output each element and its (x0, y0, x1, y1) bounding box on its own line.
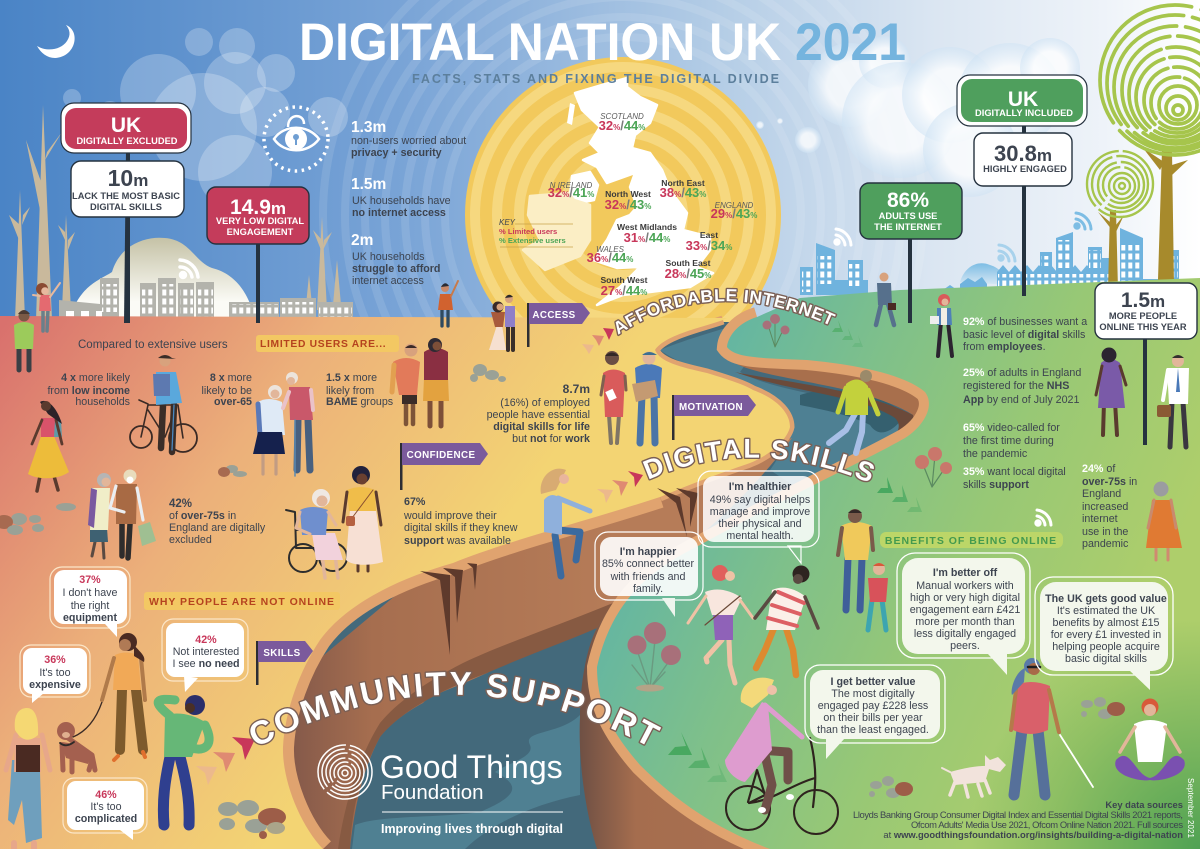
text block: non-user stats: no internet access (352, 207, 446, 219)
text block: low income: from low income (47, 385, 130, 397)
text block: 67%: support was available (404, 535, 511, 547)
rocks: top (470, 364, 506, 382)
regional statistics (548, 112, 757, 298)
person: meditating (1115, 698, 1185, 780)
speech bubble: 42%: 42% (195, 634, 217, 646)
rocks: bike (869, 776, 913, 798)
text block: non-user stats: 2m (351, 232, 373, 249)
date: September 2021 (1186, 778, 1195, 839)
text block: non-user stats: non-users worried about (351, 135, 466, 147)
speech bubble: 42% (162, 619, 248, 692)
left trees (9, 105, 341, 320)
person: waving woman (33, 283, 60, 331)
rocks: right (1081, 697, 1125, 719)
speech bubble: happier: with friends and (610, 571, 685, 583)
person: woman walking dog (73, 633, 145, 760)
map key: % Limited users (499, 227, 557, 236)
icon: padlock eye (264, 107, 328, 171)
text block: video-called (963, 422, 1060, 460)
sign: digitally included: DIGITALLY INCLUDED (975, 108, 1073, 118)
dog (57, 722, 95, 772)
speech bubble: better value: than the least engaged. (817, 724, 929, 736)
person: child (868, 563, 888, 630)
text block: low income (47, 372, 131, 408)
flag: access: ACCESS (532, 310, 576, 321)
canyon right wall (580, 603, 790, 849)
person: man in yellow (838, 509, 873, 610)
text block: BAME (326, 372, 393, 408)
person: sitting woman (541, 469, 590, 576)
windows (802, 240, 1178, 292)
sign: 14.9m: 14.9m (230, 196, 286, 219)
speech bubble: happier: 85% connect better (602, 558, 694, 570)
speech bubble: 36%: It's too (39, 667, 71, 679)
regional statistics: 28%/45% (665, 266, 711, 281)
sign: 14.9m: ENGAGEMENT (227, 227, 294, 237)
key data sources: Lloyds Banking Group Consumer Digital Index and Essential Digital Skills 2021 reports, (853, 809, 1183, 820)
river shading (352, 322, 905, 849)
flag: skills (256, 641, 313, 685)
sun (465, 57, 781, 373)
limited users heading: LIMITED USERS ARE... (260, 339, 386, 350)
sign: 10m (71, 161, 184, 217)
speech bubble: better value: engaged pay £228 less (818, 700, 928, 712)
text block: over-75s online: internet (1082, 513, 1118, 525)
flowers: bottom (628, 622, 681, 692)
canyon water (280, 322, 950, 849)
text block: NHS: App by end of July 2021 (963, 394, 1079, 406)
text block: over-75s: of over-75s in (169, 510, 236, 522)
speech bubble: 46% (63, 778, 147, 840)
map: Great Britain (575, 78, 713, 305)
person: running woman (688, 565, 753, 683)
limited users heading (78, 335, 399, 352)
flag: skills: SKILLS (263, 648, 301, 659)
benefits heading: BENEFITS OF BEING ONLINE (885, 535, 1057, 547)
limited users heading: Compared to extensive users (78, 339, 228, 351)
arrows: green after skills (877, 477, 922, 512)
key data sources: at www.goodthingsfoundation.org/insights/building-a-digital-nation (883, 829, 1183, 840)
rocks: left (0, 503, 76, 535)
speech bubble: happier (595, 532, 703, 617)
yellow land (0, 316, 790, 849)
text block: 67%: would improve their (403, 510, 497, 522)
speech bubble: better off: engagement earn £421 (910, 604, 1020, 616)
regional statistics: South West (600, 275, 648, 285)
couple (489, 295, 515, 350)
text block: over-75s: 42% (169, 498, 192, 510)
arrows: to community support (196, 737, 255, 785)
speech bubble: better value: on their bills per year (823, 712, 923, 724)
right cloud (756, 36, 1080, 197)
rocks: bottom (218, 800, 286, 839)
key data sources: Ofcom Adults' Media Use 2021, Ofcom Online Nation 2021. Full sources (911, 819, 1183, 830)
flowers: river (762, 314, 790, 347)
person: woman with white cane (1011, 658, 1093, 795)
old couple with bags (88, 470, 156, 558)
text block: NHS: registered for the NHS (963, 380, 1069, 392)
decorative rings around sun (323, 0, 923, 515)
text block: non-user stats: 1.5m (351, 176, 386, 193)
sign: 14.9m (207, 187, 309, 323)
speech bubble: healthier (698, 471, 819, 563)
flag: confidence (400, 443, 488, 490)
text block: over-75s online: over-75s in (1082, 476, 1137, 488)
excluded town (59, 238, 353, 323)
buildings (800, 228, 1193, 296)
text block: 8.7m (487, 382, 590, 445)
speech bubble: better off (897, 553, 1030, 675)
text block: video-called: 65% video-called for (963, 422, 1060, 434)
person: wheelchair user (286, 489, 347, 578)
sign: digitally excluded: DIGITALLY EXCLUDED (76, 136, 178, 146)
text block: BAME: BAME groups (326, 396, 393, 408)
person: businessman (876, 272, 896, 325)
speech bubble: better value: The most digitally (831, 688, 915, 700)
speech bubble: good value: helping people acquire (1052, 641, 1160, 653)
text block: low income: households (75, 396, 130, 408)
speech bubble: 37%: I don't have (63, 587, 118, 599)
speech bubble: 42%: Not interested (173, 646, 239, 658)
speech bubble: 37%: equipment (63, 612, 117, 624)
text block: non-user stats: UK households have (352, 195, 451, 207)
curved heading: digital skills: DIGITAL SKILLS (641, 438, 876, 482)
flag: access (527, 303, 590, 347)
speech bubble: 36% (20, 645, 90, 703)
canyon dark band (338, 603, 613, 849)
sign: digitally included: UK (1008, 88, 1038, 111)
regional statistics: 33%/34% (686, 238, 732, 253)
speech bubble: better off: I'm better off (933, 567, 998, 579)
map key: KEY (499, 218, 516, 227)
text block: 8.7m: digital skills for life (493, 421, 590, 433)
text block: NHS (963, 367, 1081, 406)
map: Northern Ireland (570, 172, 598, 203)
two men (392, 338, 449, 426)
person: green shirt man (14, 310, 34, 370)
text block: over-65 (202, 372, 252, 408)
sign: 10m: DIGITAL SKILLS (90, 202, 162, 212)
curved heading: community support: COMMUNITY SUPPORT (248, 670, 663, 746)
flag: confidence: CONFIDENCE (407, 450, 475, 461)
regional statistics: ENGLAND (715, 201, 754, 210)
speech bubble: 46%: complicated (75, 813, 137, 825)
why heading: WHY PEOPLE ARE NOT ONLINE (149, 596, 335, 608)
sign: 30.8m: 30.8m (994, 141, 1052, 166)
speech bubble: better off: more per month than (915, 616, 1015, 628)
arrows: to affordable internet (582, 328, 614, 354)
person: woman on bicycle (725, 678, 838, 834)
small fingerprint tree (1087, 151, 1153, 290)
regional statistics: West Midlands (617, 222, 677, 232)
sign: 10m: 10m (108, 165, 148, 191)
text block: over-75s (169, 498, 266, 546)
sign: 14.9m: VERY LOW DIGITAL (216, 216, 304, 226)
sign: 30.8m: HIGHLY ENGAGED (983, 164, 1067, 174)
person: cyclist (130, 355, 197, 452)
speech bubble: 36%: 36% (44, 654, 66, 666)
sign: 86%: 86% (887, 189, 929, 212)
text block: over-75s online: increased (1082, 501, 1128, 513)
speech bubble: better off: high or very high digital (910, 592, 1020, 604)
text block: non-user stats: 1.3m (351, 119, 386, 136)
regional statistics: 32%/41% (548, 185, 594, 200)
person: man in green (158, 695, 209, 825)
text block: businesses: basic level of digital skills (963, 329, 1085, 341)
sign: 1.5m: ONLINE THIS YEAR (1099, 322, 1187, 332)
sign: 10m: LACK THE MOST BASIC (72, 191, 180, 201)
text block: non-user stats: struggle to afford (352, 263, 440, 275)
text block: NHS: 25% of adults in England (963, 367, 1081, 379)
person: running woman striped (755, 566, 818, 675)
guide dog (942, 755, 1006, 797)
regional statistics: 32%/44% (599, 118, 645, 133)
regional statistics: South East (666, 258, 711, 268)
logo: Good Things Foundation: Improving lives through digital (381, 821, 563, 836)
sign: digitally excluded: UK (111, 114, 141, 137)
workers (601, 351, 662, 443)
logo: fingerprint (318, 745, 372, 799)
grey buildings (59, 278, 353, 323)
text block: over-65: 8 x more (210, 372, 252, 384)
map key: % Extensive users (499, 236, 566, 245)
speech bubble: better off: Manual workers with (916, 580, 1014, 592)
text block: local support: 35% want local digital (963, 466, 1066, 478)
logo: Good Things Foundation: Foundation (381, 781, 484, 804)
sign: digitally included (957, 75, 1087, 296)
regional statistics: 36%/44% (587, 250, 633, 265)
text block: businesses (963, 316, 1087, 353)
regional statistics: 38%/43% (660, 185, 706, 200)
sky background (0, 0, 1200, 330)
green bank (597, 278, 1200, 849)
icon: wifi white right (1036, 510, 1051, 525)
text block: over-75s online: 24% of (1082, 463, 1115, 475)
flag: motivation (672, 395, 756, 440)
text block: 8.7m: 8.7m (563, 382, 590, 396)
speech bubble: 37% (50, 567, 130, 637)
text block: over-75s online: England (1082, 488, 1121, 500)
arrows: to digital skills (597, 471, 643, 503)
text block: video-called: the pandemic (963, 448, 1028, 460)
speech bubble: good value: It's estimated the UK (1057, 605, 1156, 617)
curved heading: affordable internet: AFFORDABLE INTERNET (614, 288, 838, 336)
icon: wifi white left (180, 260, 198, 278)
speech bubble: 46%: 46% (95, 789, 117, 801)
text block: 67% (403, 496, 518, 547)
sign: 86% (860, 183, 962, 323)
sign: 86%: ADULTS USE (879, 211, 937, 221)
speech bubble: better off: peers. (950, 640, 980, 652)
text block: non-user stats: UK households (352, 251, 424, 263)
person: yellow skirt woman (28, 401, 69, 491)
person: waving woman right (438, 281, 458, 326)
canyon brown wall (270, 438, 792, 849)
speech bubble: happier: family. (633, 583, 663, 595)
regional statistics: North East (661, 178, 705, 188)
speech bubble: better value (805, 665, 945, 759)
text block: over-75s: excluded (169, 534, 212, 546)
sign: 1.5m: 1.5m (1121, 289, 1165, 312)
person: walking yellow jacket (829, 370, 878, 453)
cracks (420, 488, 698, 655)
flowers: right (915, 447, 952, 487)
sign: 1.5m: MORE PEOPLE (1109, 311, 1177, 321)
text block: businesses: from employees. (963, 341, 1046, 353)
regional statistics: WALES (596, 245, 625, 254)
speech bubble: 36%: expensive (29, 679, 81, 691)
text block: non-user stats (351, 119, 466, 287)
text block: businesses: 92% of businesses want a (963, 316, 1087, 328)
person: purple woman (1096, 348, 1126, 435)
regional statistics: East (700, 230, 718, 240)
text block: over-75s: England are digitally (169, 522, 266, 534)
text block: 8.7m: people have essential (487, 409, 590, 421)
text block: low income: 4 x more likely (61, 372, 131, 384)
sign: digitally excluded (61, 103, 191, 323)
map: Republic of Ireland (523, 193, 590, 270)
regional statistics: 32%/43% (605, 197, 651, 212)
speech bubble: healthier: 49% say digital helps (710, 494, 810, 506)
speech bubble: healthier: mental health. (726, 530, 794, 542)
speech bubble: good value: The UK gets good value (1045, 593, 1167, 605)
left bubble cloud (63, 28, 348, 209)
text block: 67%: 67% (404, 496, 426, 508)
text block: over-75s online (1082, 463, 1137, 550)
bay wall shadow (735, 372, 913, 459)
speech bubble: healthier: manage and improve (710, 506, 810, 518)
speech bubble: better value: I get better value (831, 676, 916, 688)
text block: over-65: over-65 (214, 396, 252, 408)
sign: 86%: THE INTERNET (874, 222, 942, 232)
map: Hebrides (567, 103, 575, 125)
icons: wifi blue (835, 229, 851, 245)
speech bubble: happier: I'm happier (620, 546, 676, 558)
large fingerprint tree (1100, 5, 1200, 285)
text block: BAME: 1.5 x more (326, 372, 377, 384)
text block: local support: skills support (963, 479, 1029, 491)
key data sources: Key data sources (1105, 799, 1183, 810)
bay wall (722, 345, 950, 459)
regional statistics: SCOTLAND (600, 112, 644, 121)
person: man with briefcase (1157, 355, 1189, 447)
text block: over-75s online: pandemic (1082, 538, 1129, 550)
regional statistics: N IRELAND (550, 181, 593, 190)
text block: over-75s online: use in the (1082, 526, 1128, 538)
cloud hill (70, 238, 255, 318)
regional statistics: 29%/43% (711, 206, 757, 221)
regional statistics: 27%/44% (601, 283, 647, 298)
person: red-haired woman (930, 294, 952, 356)
windows (102, 284, 352, 318)
logo: Good Things Foundation (380, 749, 563, 836)
speech bubble: good value: benefits by almost £15 (1053, 617, 1160, 629)
text block: non-user stats: internet access (352, 275, 424, 287)
flag: motivation: MOTIVATION (679, 402, 743, 413)
key data sources (853, 799, 1183, 840)
text block: BAME: likely from (326, 385, 374, 397)
sign: 1.5m (1095, 283, 1197, 445)
speech bubble: better off: less digitally engaged (914, 628, 1016, 640)
speech bubble: 42%: I see no need (172, 658, 240, 670)
speech bubble: 37%: 37% (79, 574, 101, 586)
subtitle: FACTS, STATS AND FIXING THE DIGITAL DIVIDE (412, 72, 779, 86)
text block: 8.7m: but not for work (512, 433, 590, 445)
rock clusters (0, 364, 1125, 839)
map key (499, 218, 573, 247)
speech bubble: good value: basic digital skills (1065, 653, 1147, 665)
right city (800, 228, 1193, 296)
speech bubble: 46%: It's too (90, 801, 122, 813)
UK map (523, 78, 713, 305)
person: blonde woman from behind (6, 708, 50, 849)
text block: video-called: the first time during (963, 435, 1054, 447)
regional statistics: North West (605, 189, 651, 199)
moon icon (37, 25, 75, 58)
speech bubble: healthier: their physical and (718, 518, 802, 530)
person: sari woman (343, 466, 383, 571)
speech bubble: healthier: I'm healthier (729, 481, 791, 493)
speech bubble: good value: for every £1 invested in (1051, 629, 1161, 641)
person: elderly woman in orange (1146, 482, 1182, 560)
text block: local support (963, 466, 1066, 491)
old couple (253, 372, 313, 476)
rocks: mid (218, 465, 247, 477)
regional statistics: 31%/44% (624, 230, 670, 245)
sign: 30.8m (974, 133, 1072, 186)
text block: over-65: likely to be (202, 385, 252, 397)
title: DIGITAL NATION UK 2021 (299, 13, 906, 72)
speech bubble: good value (1035, 577, 1173, 690)
arrows: green after support (668, 732, 727, 782)
text block: non-user stats: privacy + security (351, 147, 442, 159)
speech bubble: 37%: the right (71, 600, 109, 612)
why heading (144, 592, 340, 610)
logo: Good Things Foundation: Good Things (380, 749, 563, 785)
arrows: green after internet (832, 320, 863, 347)
text block: 8.7m: (16%) of employed (500, 397, 590, 409)
text block: 67%: digital skills if they knew (404, 522, 518, 534)
